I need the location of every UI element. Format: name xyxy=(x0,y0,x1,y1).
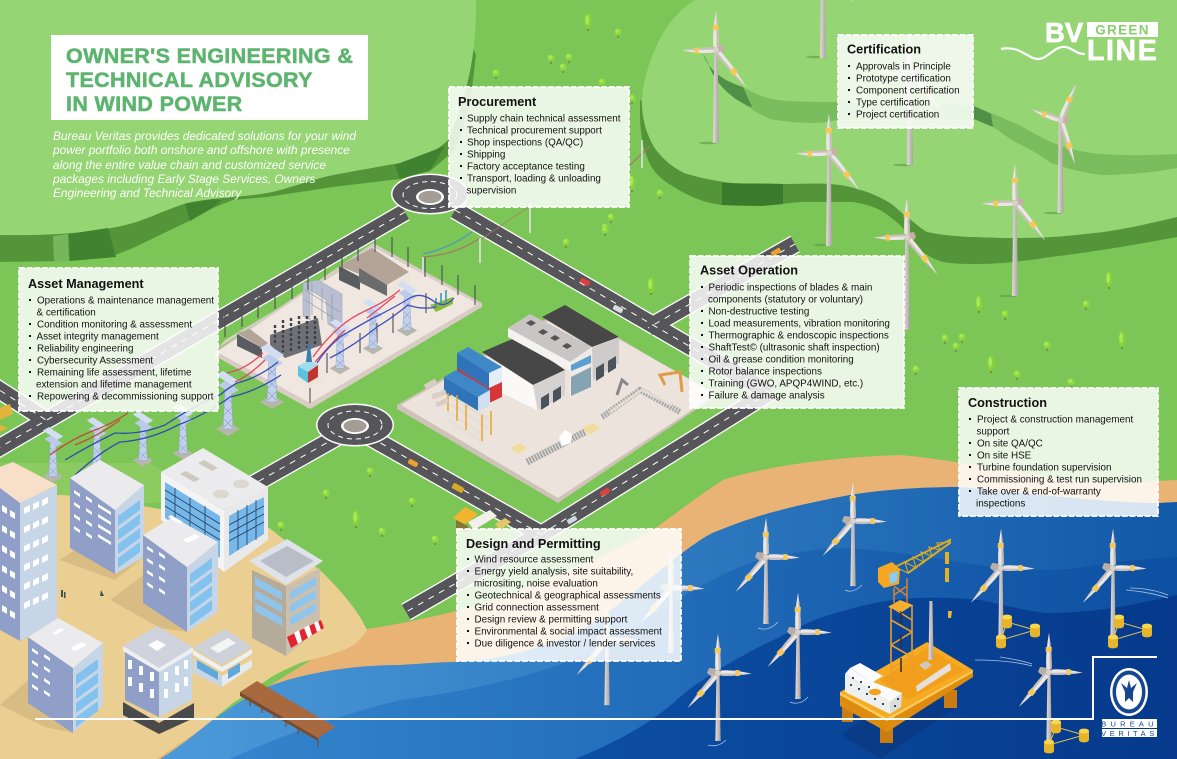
city: glass office C xyxy=(161,448,268,572)
city: building tall left xyxy=(0,462,57,641)
panel: construction: Construction xyxy=(968,396,1047,410)
buoy xyxy=(948,611,952,618)
panel: procurement: Procurement xyxy=(458,95,537,109)
water ripples xyxy=(708,585,1168,746)
logo: Bureau Veritas seal: BUREAU xyxy=(1101,720,1158,728)
panel: asset management: extension and lifetime management xyxy=(36,379,192,390)
framing line xyxy=(35,657,1157,719)
offshore wind turbines xyxy=(575,482,1147,745)
panel: asset operation: Rotor balance inspections xyxy=(708,366,822,377)
inner hill band dark xyxy=(703,54,993,127)
panel: procurement: Factory acceptance testing xyxy=(467,161,585,172)
panel: certification xyxy=(838,35,973,128)
panel: asset management: & certification xyxy=(36,307,96,318)
pylons xyxy=(43,281,417,482)
logo: BV Green Line: LINE xyxy=(1087,35,1158,67)
title: OWNER'S ENGINEERING & xyxy=(66,44,353,68)
panel: design and permitting: Design review & permitting support xyxy=(474,614,628,625)
panel: asset operation: ShaftTest© (ultrasonic shaft inspection) xyxy=(708,342,880,353)
title xyxy=(51,35,368,120)
sea: shallow xyxy=(160,487,1177,759)
overhead lines to substation xyxy=(423,146,650,257)
wooden pier xyxy=(240,681,335,747)
installation crane xyxy=(878,540,950,680)
factory building xyxy=(482,305,619,410)
logo: BV Green Line: GREEN xyxy=(1095,22,1150,38)
onshore wind turbines xyxy=(682,0,1079,330)
panel: asset operation xyxy=(690,256,904,408)
panel: asset management: Cybersecurity Assessment xyxy=(37,355,153,366)
panel: asset operation: components (statutory or voluntary) xyxy=(708,294,863,305)
substation small hut xyxy=(237,329,268,358)
panel: asset operation: Oil & grease condition monitoring xyxy=(708,354,854,365)
switchyard insulators xyxy=(430,290,453,312)
panel: design and permitting: Design and Permitting xyxy=(466,537,601,551)
panel: procurement: Shipping xyxy=(467,149,505,160)
panel: asset operation: Load measurements, vibration monitoring xyxy=(708,318,890,329)
utility poles xyxy=(423,140,642,275)
floating turbine foundations xyxy=(996,615,1152,753)
panel: design and permitting: Environmental & social impact assessment xyxy=(474,626,662,637)
panel: asset operation: Failure & damage analysis xyxy=(708,390,825,401)
hill: top-left shaded edge xyxy=(0,40,476,262)
panel: certification: Project certification xyxy=(856,109,939,120)
power cables xyxy=(50,290,454,475)
panel: procurement: Transport, loading & unloading xyxy=(467,173,601,184)
people on beach xyxy=(61,590,104,598)
logo: Bureau Veritas seal: VERITAS xyxy=(1101,729,1158,738)
petrol station west xyxy=(0,404,13,432)
platform accommodation block xyxy=(845,663,902,714)
intro text: Engineering and Technical Advisory xyxy=(53,186,242,200)
city: apartment E xyxy=(0,618,103,733)
transformer unit xyxy=(297,344,323,388)
panel: construction: support xyxy=(976,426,1010,437)
hill shadow patch xyxy=(722,183,783,206)
panel: construction: On site HSE xyxy=(977,450,1032,461)
panel: asset management: Asset integrity management xyxy=(36,331,159,342)
panel: construction: Turbine foundation supervision xyxy=(977,462,1111,473)
panel: certification: Component certification xyxy=(856,85,960,96)
panel: procurement: supervision xyxy=(466,185,516,196)
panel: asset management: Reliability engineering xyxy=(37,343,133,354)
panel: construction: inspections xyxy=(976,498,1025,509)
panel: certification: Approvals in Principle xyxy=(856,61,951,72)
substation lattice frame xyxy=(303,280,342,333)
blade racks xyxy=(425,381,491,442)
jack-up installation platform xyxy=(840,642,973,759)
hill: upper right xyxy=(642,0,1177,238)
substation switchgear racks xyxy=(270,316,322,358)
city: small shop G xyxy=(193,629,252,687)
panel: construction xyxy=(959,388,1158,516)
sand: far shore xyxy=(150,455,1177,759)
panel: design and permitting: Due diligence & investor / lender services xyxy=(474,638,655,649)
panel: asset management xyxy=(19,268,218,411)
sea: mid xyxy=(230,548,1177,759)
panel: procurement: Supply chain technical assessment xyxy=(467,113,621,124)
intro text: power portfolio both onshore and offshore with presence xyxy=(52,143,350,157)
hill: top-left xyxy=(0,0,476,235)
panel: asset management: Operations & maintenance management xyxy=(37,295,214,306)
panel: design and permitting: micrositing, noise evaluation xyxy=(474,578,598,589)
panel: asset management: Condition monitoring & assessment xyxy=(37,319,192,330)
panel: asset operation: Non-destructive testing xyxy=(708,306,809,317)
factory plot xyxy=(397,307,716,503)
panel: procurement: Shop inspections (QA/QC) xyxy=(467,137,583,148)
title: IN WIND POWER xyxy=(66,92,243,116)
sand: beach xyxy=(0,495,367,759)
sea: deep xyxy=(575,595,1177,759)
intro text: along the entire value chain and customized service xyxy=(53,158,326,172)
roundabout south xyxy=(316,404,394,446)
strip of pale ground behind city xyxy=(0,463,210,510)
substation fence xyxy=(225,230,475,403)
panel: design and permitting: Geotechnical & geographical assessments xyxy=(474,590,661,601)
panel: certification: Prototype certification xyxy=(856,73,951,84)
city: apartment B xyxy=(60,460,144,580)
panel: construction: Project & construction management xyxy=(977,414,1133,425)
petrol station xyxy=(453,507,511,532)
title: TECHNICAL ADVISORY xyxy=(66,68,313,92)
city: apartment D xyxy=(110,515,218,632)
hill shadow accents xyxy=(53,146,445,261)
logo: Bureau Veritas seal xyxy=(1101,668,1158,738)
panel: asset management: Repowering & decommissioning support xyxy=(37,391,214,402)
road network xyxy=(0,210,795,612)
platform mast and blades xyxy=(916,601,951,692)
substation plot xyxy=(215,243,482,409)
panel: asset operation: Training (GWO, APQP4WIND, etc.) xyxy=(708,378,863,389)
trees xyxy=(277,13,1126,545)
panel: asset management: Remaining life assessment, lifetime xyxy=(37,367,192,378)
panel: procurement xyxy=(449,87,629,207)
panel: asset management: Asset Management xyxy=(28,277,144,291)
panel: procurement: Technical procurement support xyxy=(467,125,602,136)
panel: design and permitting: Energy yield analysis, site suitability, xyxy=(474,566,633,577)
panel: certification: Certification xyxy=(847,42,921,56)
panel: design and permitting: Grid connection assessment xyxy=(474,602,599,613)
hill: lower right shaded band xyxy=(640,100,1177,264)
roundabout north xyxy=(391,174,469,214)
logo: BV Green Line xyxy=(1001,17,1158,67)
panel: asset operation: Periodic inspections of blades & main xyxy=(708,282,872,293)
panel: asset operation: Thermographic & endoscopic inspections xyxy=(708,330,889,341)
shipping containers xyxy=(444,347,502,412)
substation building xyxy=(339,248,410,296)
city: shop with red awning H xyxy=(249,539,324,656)
robotic arm conveyors xyxy=(602,372,682,417)
logo: BV Green Line: BV xyxy=(1045,17,1084,48)
panel: design and permitting xyxy=(457,529,681,661)
panel: certification: Type certification xyxy=(856,97,930,108)
panel: design and permitting: Wind resource assessment xyxy=(474,554,594,565)
intro text xyxy=(52,129,356,200)
panel: construction: Commissioning & test run supervision xyxy=(977,474,1142,485)
panel: construction: Take over & end-of-warranty xyxy=(977,486,1101,497)
panel: construction: On site QA/QC xyxy=(977,438,1043,449)
city: building F xyxy=(123,626,194,734)
transport trucks xyxy=(510,423,600,462)
panel: asset operation: Asset Operation xyxy=(700,264,798,278)
inner hill band xyxy=(703,54,1177,175)
intro text: Bureau Veritas provides dedicated solutions for your wind xyxy=(53,129,356,143)
intro text: packages including Early Stage Services, Owners xyxy=(52,172,315,186)
vehicles xyxy=(407,247,782,525)
